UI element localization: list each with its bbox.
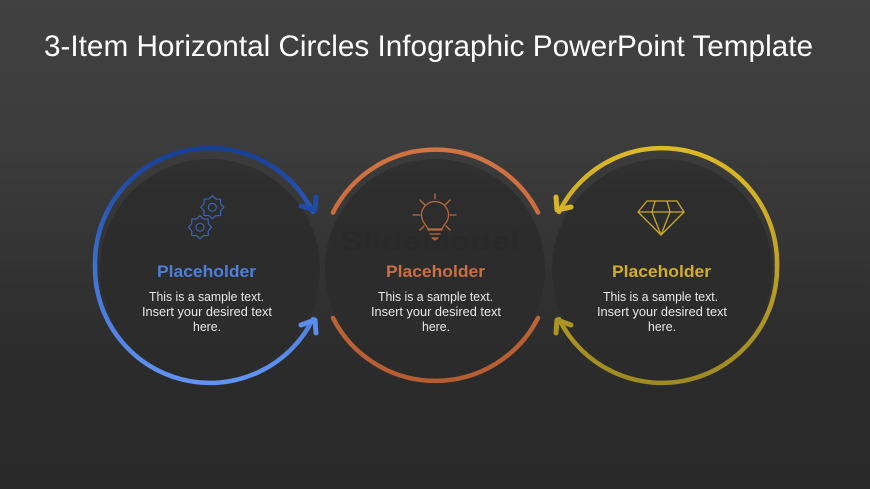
icon: gears bbox=[188, 196, 224, 239]
panel: orange circle bbox=[325, 150, 545, 381]
panel: blue circle bbox=[95, 148, 320, 383]
title: 3-Item Horizontal Circles Infographic PowerPoint Template bbox=[44, 30, 813, 63]
blue heading: Placeholder bbox=[157, 262, 256, 281]
watermark: SlideModel bbox=[340, 226, 520, 256]
yellow heading: Placeholder bbox=[612, 262, 711, 281]
orange body text: This is a sample text. bbox=[378, 290, 493, 304]
blue disc bbox=[100, 159, 320, 379]
blue ring top arc with arrow bbox=[95, 148, 316, 266]
blue body text: Insert your desired text bbox=[142, 305, 273, 319]
yellow body text: This is a sample text. bbox=[603, 290, 718, 304]
yellow ring top arc with arrow bbox=[556, 148, 777, 266]
yellow ring bottom arc with arrow bbox=[556, 266, 777, 383]
blue ring bottom arc with arrow bbox=[95, 266, 316, 383]
orange top arc bbox=[333, 150, 538, 212]
blue body text: here. bbox=[193, 320, 221, 334]
orange heading: Placeholder bbox=[386, 262, 485, 281]
yellow disc bbox=[552, 159, 772, 379]
panel: yellow circle bbox=[552, 148, 777, 383]
yellow body text: here. bbox=[648, 320, 676, 334]
blue body text: This is a sample text. bbox=[149, 290, 264, 304]
blue body text bbox=[142, 290, 273, 334]
orange disc bbox=[325, 159, 545, 379]
orange body text: here. bbox=[422, 320, 450, 334]
orange bottom arc bbox=[333, 318, 538, 381]
icon: diamond bbox=[638, 201, 684, 235]
yellow body text: Insert your desired text bbox=[597, 305, 728, 319]
orange body text: Insert your desired text bbox=[371, 305, 502, 319]
icon: light bulb bbox=[413, 194, 456, 240]
yellow body text bbox=[597, 290, 728, 334]
orange body text bbox=[371, 290, 502, 334]
